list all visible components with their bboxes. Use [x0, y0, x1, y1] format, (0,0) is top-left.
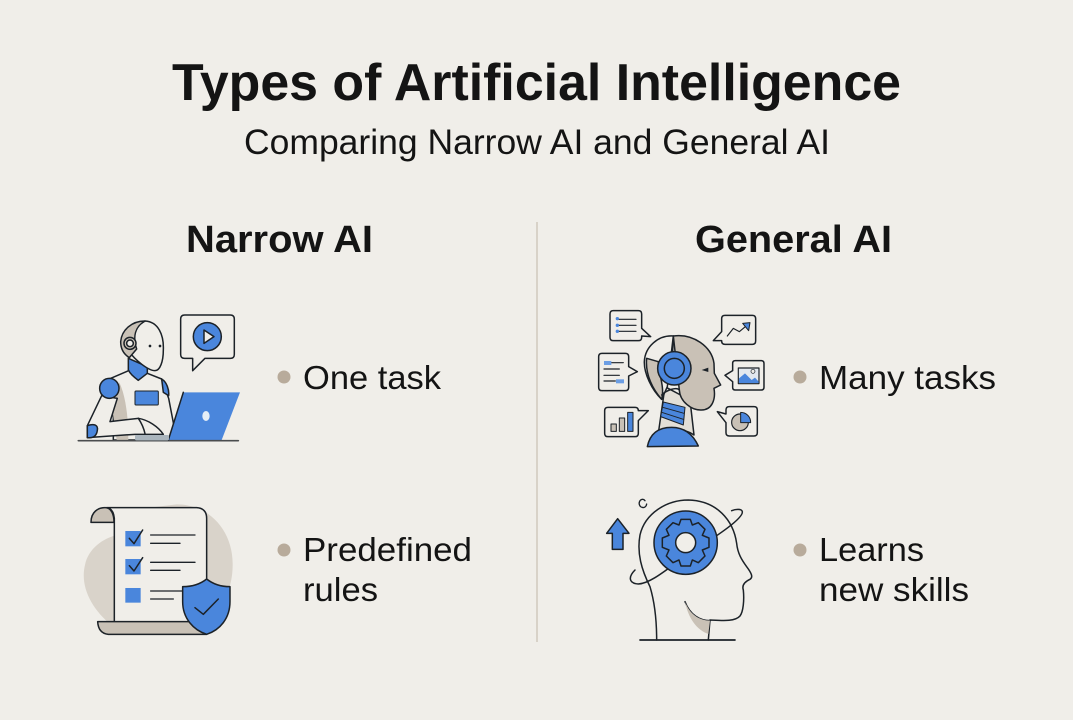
bullet: Predefined rules: rules	[303, 571, 378, 608]
title: Types of Artificial Intelligence	[172, 54, 901, 112]
icon: head with gear and growth arrow	[607, 499, 752, 640]
bullet: Learns new skills	[794, 531, 969, 608]
heading: General AI: General AI	[695, 219, 892, 261]
icon: robot using laptop	[78, 315, 240, 441]
subtitle: Comparing Narrow AI and General AI	[244, 123, 830, 162]
heading: Narrow AI: Narrow AI	[186, 219, 373, 261]
bullet: One task: One task	[303, 359, 442, 396]
icon: scroll checklist with shield	[84, 504, 233, 634]
bullet: Learns new skills: Learns	[819, 531, 924, 568]
bullet: Learns new skills: new skills	[819, 571, 969, 608]
bullet: Many tasks: Many tasks	[819, 359, 996, 396]
bullet: Predefined rules	[278, 531, 472, 608]
bullet: Predefined rules: Predefined	[303, 531, 472, 568]
icon: AI head with task bubbles	[599, 311, 764, 447]
